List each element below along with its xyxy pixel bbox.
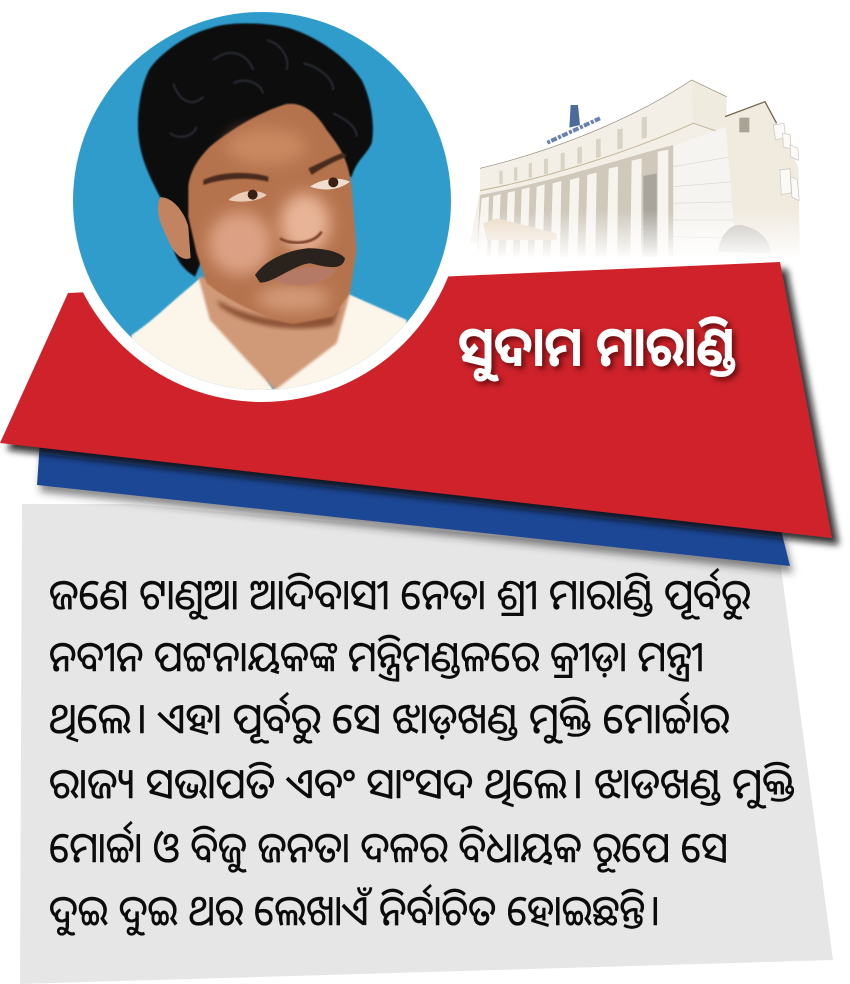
upper windows xyxy=(499,116,647,184)
eyebrows xyxy=(203,173,268,185)
side wing xyxy=(725,102,800,257)
balconies xyxy=(773,123,799,201)
body line 6: ଦୁଇ ଦୁଇ ଥର ଲେଖାଏଁ ନିର୍ବାଚିତ ହୋଇଛନ୍ତି। xyxy=(49,884,660,935)
hair curls xyxy=(170,40,357,137)
body line 5: ମୋର୍ଚ୍ଚା ଓ ବିଜୁ ଜନତା ଦଳର ବିଧାୟକ ରୂପେ ସେ xyxy=(49,820,728,872)
face xyxy=(188,104,357,324)
nose shadow xyxy=(280,232,322,243)
face highlights xyxy=(280,193,330,253)
fade out at foot xyxy=(460,210,810,260)
porch and emblem xyxy=(483,218,557,240)
red banner xyxy=(0,262,832,538)
body text xyxy=(49,568,795,935)
building illustration xyxy=(460,80,810,260)
corner block xyxy=(673,126,738,257)
body line 3: ଥିଲେ। ଏହା ପୂର୍ବରୁ ସେ ଝାଡ଼ଖଣ୍ଡ ମୁକ୍ତି ମୋର୍ଚ୍ଚାର xyxy=(49,692,729,744)
glass doors xyxy=(643,173,657,257)
colonnade xyxy=(477,145,673,257)
shirt xyxy=(130,278,408,390)
neck xyxy=(198,277,350,390)
main curved facade xyxy=(470,80,733,243)
portrait xyxy=(73,12,451,402)
tree xyxy=(718,225,770,253)
body line 4: ରାଜ୍ୟ ସଭାପତି ଏବଂ ସାଂସଦ ଥିଲେ। ଝାଡଖଣ୍ଡ ମୁକ୍ତି xyxy=(49,760,795,809)
lips xyxy=(273,267,337,286)
eyes xyxy=(228,191,267,202)
body line 1: ଜଣେ ଟାଣୁଆ ଆଦିବାସୀ ନେତା ଶ୍ରୀ ମାରାଣ୍ଡି ପୂର୍ବରୁ xyxy=(49,568,750,620)
body line 2: ନବୀନ ପଟ୍ଟନାୟକଙ୍କ ମନ୍ତ୍ରିମଣ୍ଡଳରେ କ୍ରୀଡ଼ା ମନ୍ତ୍ରୀ xyxy=(49,633,704,681)
title: ସୁଦାମ ମାରାଣ୍ଡି xyxy=(458,316,736,382)
hair xyxy=(138,23,373,277)
panel: grey text panel xyxy=(20,504,833,984)
blue ribbon xyxy=(37,440,790,566)
ear xyxy=(158,197,191,259)
moustache xyxy=(255,248,345,283)
